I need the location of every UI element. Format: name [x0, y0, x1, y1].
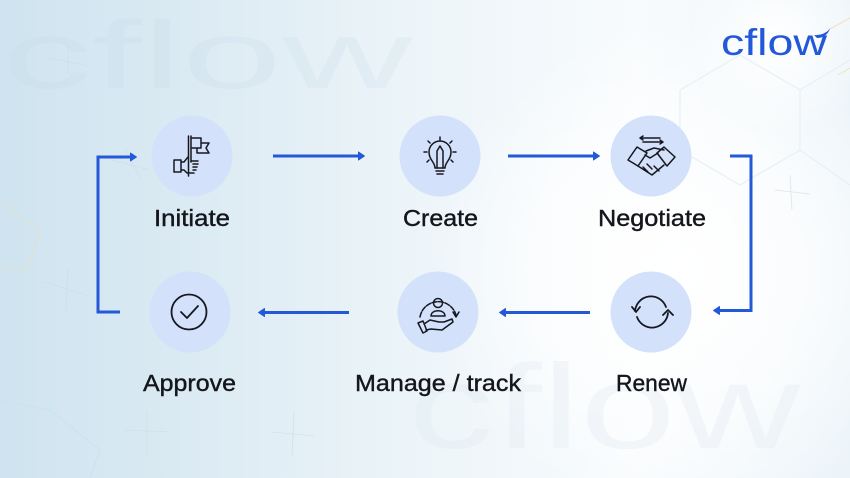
step: Renew: [610, 272, 692, 396]
arrow: Manage to Approve: [258, 308, 349, 316]
step: Initiate: [152, 116, 232, 231]
icon: light bulb with pencil: [424, 137, 456, 174]
step: Approve: [143, 272, 236, 396]
icon: handshake: [628, 136, 675, 175]
label: Negotiate: Negotiate: [598, 205, 706, 231]
label: Manage / track: Manage / track: [355, 370, 522, 396]
circle: Renew: [610, 272, 692, 352]
circle: Initiate: [152, 116, 232, 196]
arrow: Approve to Initiate: [98, 153, 136, 312]
icon: renew arrows: [632, 296, 673, 328]
circle: Create: [400, 116, 480, 196]
circle: Approve: [150, 272, 230, 352]
step: Manage / track: [355, 272, 522, 396]
icon: check mark: [172, 294, 206, 330]
circle: Negotiate: [610, 116, 692, 196]
arrow: Create to Negotiate: [508, 152, 600, 160]
logo: cflow: cflow: [721, 22, 827, 63]
arrow: Initiate to Create: [273, 152, 364, 160]
icon: person in hand with cycle: [418, 298, 459, 333]
label: Initiate: Initiate: [154, 205, 230, 231]
watermark: bottom-right: cflow: [408, 340, 800, 474]
label: Create: Create: [403, 205, 478, 231]
label: Approve: Approve: [143, 370, 236, 396]
watermark: top-left: cflow: [2, 2, 413, 109]
icon: thumb and flag: [174, 136, 209, 176]
circle: Manage / track: [398, 272, 478, 352]
step: Negotiate: [598, 116, 706, 231]
label: Renew: Renew: [616, 370, 687, 396]
arrow: Renew to Manage: [500, 308, 590, 316]
arrow: Negotiate to Renew: [714, 156, 751, 314]
step: Create: [400, 116, 480, 231]
